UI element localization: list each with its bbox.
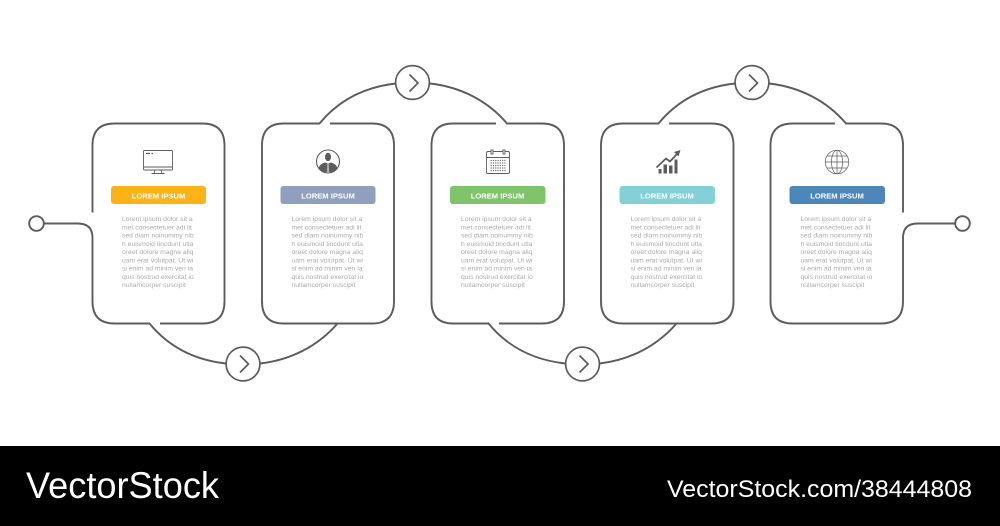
text block: step 4: quis nostrud exercitat io	[630, 274, 703, 281]
text block: step 4: sed diam noinummy nib	[630, 233, 702, 240]
footer url text: VectorStock.com/38444808	[667, 476, 972, 503]
text block: step 3: h euismoid tincdunt utla	[461, 241, 533, 248]
text block: step 2: met consectetuer adi lit	[292, 224, 362, 231]
text block: step 3: sed diam noinummy nib	[461, 233, 533, 240]
text block: step 2	[292, 216, 364, 289]
text block: step 1: si enim ad minim ven ia	[122, 266, 193, 273]
text block: step 5: h euismoid tincdunt utla	[800, 241, 872, 248]
text block: step 4: nullamcorper suscipit	[630, 282, 694, 289]
text block: step 3: oreet dolore magna aliq	[461, 249, 533, 256]
text block: step 4: Lorem ipsum dolor sit a	[630, 216, 701, 223]
text block: step 2: si enim ad minim ven ia	[292, 266, 363, 273]
text block: step 4: si enim ad minim ven ia	[630, 266, 702, 273]
text block: step 1: quis nostrud exercitat io	[122, 274, 194, 281]
card outline: step 5	[770, 124, 955, 324]
text block: step 5: met consectetuer adi lit	[800, 224, 871, 231]
text block: step 5: quis nostrud exercitat io	[800, 274, 873, 281]
text block: step 4: met consectetuer adi lit	[630, 224, 701, 231]
text block: step 3: quis nostrud exercitat io	[461, 274, 533, 281]
start node	[29, 216, 44, 231]
icon: growth chart	[656, 150, 680, 174]
end node	[955, 216, 970, 231]
icon: globe	[825, 150, 849, 174]
card outline: step 1	[92, 124, 224, 324]
icon: calendar	[486, 150, 510, 174]
text block: step 4: oreet dolore magna aliq	[630, 249, 702, 256]
timeline connector line	[44, 84, 955, 364]
footer bar	[0, 446, 1000, 526]
text block: step 1: oreet dolore magna aliq	[122, 249, 194, 256]
text block: step 1	[122, 216, 194, 289]
text block: step 3	[461, 216, 533, 289]
text block: step 1: h euismoid tincdunt utla	[122, 241, 194, 248]
text block: step 3: met consectetuer adi lit	[461, 224, 531, 231]
label: step 4	[620, 186, 715, 204]
text block: step 2: uam erat volutpat. Ut wi	[292, 257, 363, 264]
label: step 5: LOREM IPSUM	[810, 191, 864, 200]
card outline: step 4 right side	[666, 124, 734, 324]
text block: step 3: si enim ad minim ven ia	[461, 266, 532, 273]
arc to step 4 bottom	[600, 84, 735, 364]
label: step 3	[450, 186, 546, 204]
arrow button 4	[735, 66, 769, 99]
icon: monitor	[144, 150, 172, 174]
arrow button 3	[566, 347, 599, 381]
text block: step 4: uam erat volutpat. Ut wi	[630, 257, 702, 264]
arc to step 2 bottom	[260, 84, 396, 364]
text block: step 2: nullamcorper suscipit	[292, 282, 355, 289]
text block: step 1: nullamcorper suscipit	[122, 282, 186, 289]
text block: step 5: nullamcorper suscipit	[800, 282, 864, 289]
card outline: step 2 right side	[327, 124, 394, 324]
arrow button 2	[396, 66, 429, 99]
arrow button 1	[226, 347, 260, 381]
text block: step 1: met consectetuer adi lit	[122, 224, 192, 231]
text block: step 4: h euismoid tincdunt utla	[630, 241, 702, 248]
label: step 2	[280, 186, 376, 204]
text block: step 2: oreet dolore magna aliq	[292, 249, 363, 256]
text block: step 5: Lorem ipsum dolor sit a	[800, 216, 871, 223]
text block: step 3: nullamcorper suscipit	[461, 282, 525, 289]
text block: step 1: Lorem ipsum dolor sit a	[122, 216, 193, 223]
label: step 3: LOREM IPSUM	[471, 191, 524, 200]
arc to step 5 top and right side	[769, 84, 903, 212]
arc to step 3 top	[430, 84, 564, 324]
text block: step 5	[800, 216, 873, 289]
text block: step 1: sed diam noinummy nib	[122, 233, 194, 240]
text block: step 3: uam erat volutpat. Ut wi	[461, 257, 533, 264]
label: step 2: LOREM IPSUM	[301, 191, 355, 200]
label: step 5	[790, 186, 885, 204]
text block: step 2: h euismoid tincdunt utla	[292, 241, 363, 248]
text block: step 5: si enim ad minim ven ia	[800, 266, 872, 273]
text block: step 4	[630, 216, 703, 289]
text block: step 5: oreet dolore magna aliq	[800, 249, 872, 256]
text block: step 2: sed diam noinummy nib	[292, 233, 363, 240]
text block: step 5: uam erat volutpat. Ut wi	[800, 257, 872, 264]
footer logo text: VectorStock	[26, 465, 219, 506]
text block: step 2: Lorem ipsum dolor sit a	[292, 216, 362, 223]
text block: step 2: quis nostrud exercitat io	[292, 274, 364, 281]
icon: businessman	[316, 150, 340, 173]
card outline: step 3 left side	[432, 124, 566, 364]
text block: step 5: sed diam noinummy nib	[800, 233, 872, 240]
entry connector and step 1 lower edge	[44, 224, 226, 364]
label: step 1	[111, 186, 206, 204]
label: step 4: LOREM IPSUM	[640, 191, 694, 200]
text block: step 1: uam erat volutpat. Ut wi	[122, 257, 194, 264]
label: step 1: LOREM IPSUM	[132, 191, 185, 200]
text block: step 3: Lorem ipsum dolor sit a	[461, 216, 532, 223]
